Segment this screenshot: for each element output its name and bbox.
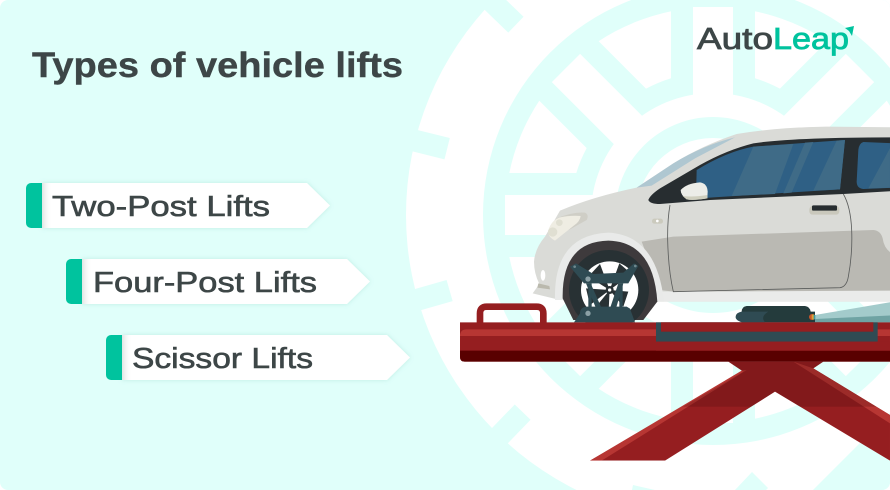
label: Two-Post Lifts: Two-Post Lifts bbox=[52, 191, 270, 223]
scissor lift arms bbox=[590, 362, 890, 461]
background gear bbox=[406, 0, 890, 490]
door outline bbox=[668, 194, 852, 292]
car body bbox=[533, 127, 890, 302]
label: Four-Post Lifts: Four-Post Lifts bbox=[93, 267, 317, 299]
label: Four-Post Lifts bbox=[66, 259, 370, 304]
windshield edge bbox=[637, 137, 735, 188]
lower body shade bbox=[642, 230, 890, 292]
lift platform bbox=[460, 322, 890, 362]
label: Scissor Lifts bbox=[106, 335, 410, 380]
hydraulic cylinder bbox=[736, 306, 815, 322]
label: Scissor Lifts: Scissor Lifts bbox=[132, 343, 313, 375]
sill bbox=[657, 291, 890, 302]
fog light bbox=[541, 270, 545, 281]
window reflections bbox=[732, 140, 845, 196]
logo: AutoLeap: Auto bbox=[697, 21, 773, 56]
vehicle on lift illustration bbox=[460, 127, 890, 461]
rear window bbox=[857, 142, 890, 189]
front window bbox=[696, 140, 845, 199]
window frame bbox=[648, 137, 890, 204]
label: Two-Post Lifts bbox=[26, 183, 330, 228]
lift handle bbox=[480, 307, 543, 323]
door handle bbox=[809, 206, 839, 215]
car bbox=[533, 127, 890, 302]
title: Types of vehicle lifts bbox=[32, 46, 403, 85]
light beam bbox=[815, 302, 890, 322]
logo: AutoLeap bbox=[697, 21, 854, 56]
logo: AutoLeap: Leap bbox=[773, 21, 849, 56]
wheel jack bbox=[570, 263, 638, 322]
wheel bbox=[555, 233, 664, 330]
side mirror bbox=[681, 182, 708, 200]
indicator light bbox=[652, 219, 663, 224]
headlight bbox=[557, 212, 588, 230]
